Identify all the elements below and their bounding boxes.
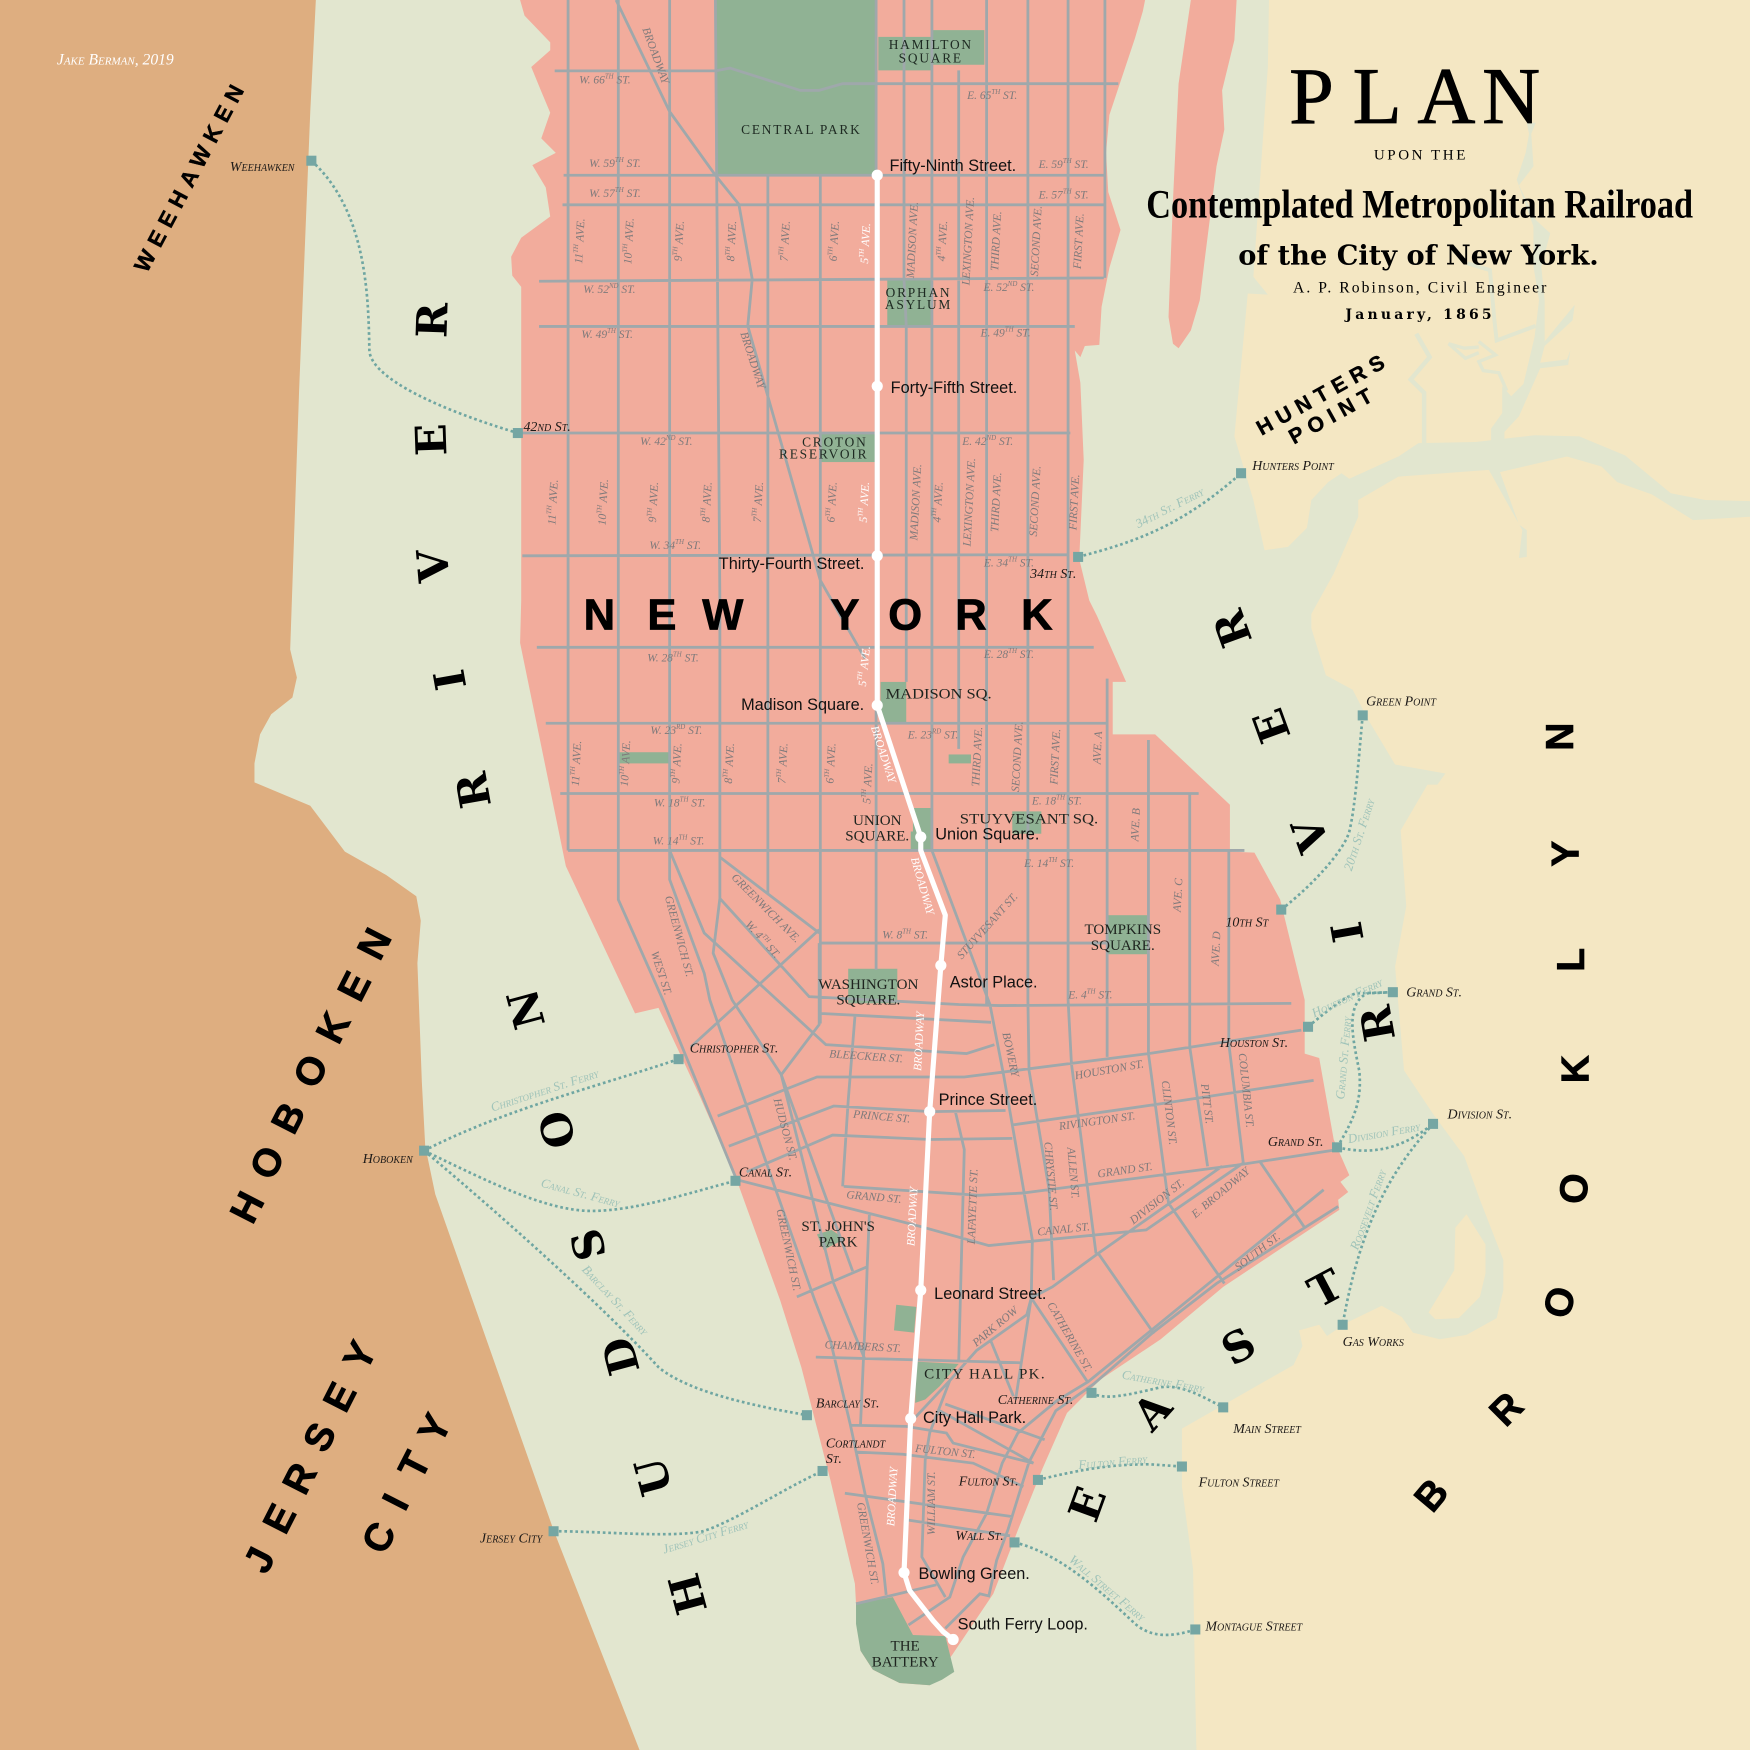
park: Union Square [911,808,931,850]
park labels: STUYVESANT SQ. [960,812,1098,828]
heading: Brooklyn: R [1482,1384,1532,1435]
heading: Hoboken: E [330,965,380,1008]
street name labels: CLINTON ST. [1159,1080,1178,1146]
street name labels: 9TH AVE. [672,220,687,262]
station labels: Prince Street. [939,1091,1037,1109]
park labels: ST. JOHN'S [801,1219,875,1235]
ferry landing labels: Montague Street [1204,1620,1304,1635]
street name labels: FULTON ST. [914,1443,976,1461]
street name labels: E. 42ND ST. [961,435,1013,448]
heading: Brooklyn [1406,723,1598,1520]
title: of the City of New York: of the City of New York. [1238,241,1599,272]
heading: Hudson River: H [659,1568,718,1620]
street name labels: 6TH AVE. [824,743,839,784]
street name labels: THIRD AVE. [970,727,985,787]
ferry route labels: Fulton Ferry [1077,1452,1149,1472]
street name labels: LEXINGTON AVE. [962,458,978,548]
heading: East River: E [1059,1481,1117,1528]
heading: Jersey City: S [295,1416,345,1459]
ferry landing labels: Grand St. [1406,986,1462,1001]
street name labels: DIVISION ST. [1127,1177,1187,1228]
street name labels: FIRST AVE. [1072,213,1087,270]
street name labels: AVE. C [1172,878,1185,913]
heading: Hudson River: D [593,1332,651,1380]
park labels: THE [891,1639,920,1655]
park labels: CENTRAL PARK [741,122,862,137]
heading: New York: NEW [584,591,744,639]
street name labels: 11TH AVE. [573,218,588,264]
street name labels: 6TH AVE. [827,220,842,262]
heading: Hunters Point: HUNTERS [1253,348,1395,440]
ferry landing labels: Fulton Street [1198,1476,1280,1491]
street name labels: W. 23RD ST. [650,724,702,737]
street name labels: CHAMBERS ST. [824,1339,901,1355]
street name labels: LAFAYETTE ST. [966,1169,981,1245]
street name labels: W. 14TH ST. [653,835,704,848]
street name labels: E. 34TH ST. [983,557,1034,570]
street name labels: 9TH AVE. [646,482,661,523]
park labels: BATTERY [872,1654,939,1670]
street name labels: HOUSTON ST. [1073,1058,1145,1082]
street grid [518,0,1338,1628]
heading: Hoboken: O [285,1048,337,1095]
heading: New York: YORK [830,591,1053,639]
street name labels: W. 49TH ST. [581,328,633,341]
heading: Jersey City: R [275,1456,326,1501]
heading: Weehawken: WEEHAWKEN [129,74,252,276]
street name labels: 7TH AVE. [778,220,793,262]
heading: Brooklyn: Y [1544,841,1587,867]
street name labels: STUYVESANT ST. [955,891,1020,962]
street name labels: 7TH AVE. [751,482,766,523]
street name labels: SOUTH ST. [1233,1231,1283,1274]
street name labels: PRINCE ST. [852,1109,911,1126]
ferry route labels: 34th St. Ferry [1132,484,1207,531]
street name labels: 5TH AVE. [861,763,875,804]
ferry landing labels: Hunters Point [1251,459,1335,474]
station labels: South Ferry Loop. [958,1615,1088,1633]
ferry route labels: Grand St. Ferry [1333,1015,1354,1100]
park: small west square [618,752,669,763]
ferry landing squares [306,156,1438,1634]
park: Tompkins Square [1108,915,1147,954]
park labels: TOMPKINS [1084,922,1161,938]
heading: Hudson River: I [425,666,477,694]
street name labels: FIRST AVE. [1067,474,1082,531]
street name labels: E. 18TH ST. [1031,795,1082,807]
street name labels: AVE. A [1091,730,1105,766]
heading: Jersey City: E [315,1376,365,1419]
heading: Jersey City: C [354,1516,405,1560]
heading: Brooklyn: O [1536,1282,1585,1323]
street name labels: BOWERY [999,1031,1021,1080]
parks [618,0,1147,1685]
street name labels: W. 42ND ST. [640,435,692,448]
street name labels: 11TH AVE. [569,740,584,786]
park: Orphan Asylum [887,280,932,326]
land: New Jersey shore [0,0,640,1750]
ferry landing labels: 10th St [1225,915,1270,930]
street name labels: E. 49TH ST. [980,327,1031,340]
heading: Brooklyn: O [1552,1172,1598,1206]
street name labels: W. 28TH ST. [647,652,699,664]
street name labels: E. 57TH ST. [1038,189,1089,201]
street name labels: W. 18TH ST. [654,797,705,810]
ferry route labels: Houston Ferry [1309,975,1386,1021]
heading: Hoboken: H [222,1185,273,1230]
park labels: UNION [853,813,902,829]
street name labels: W. 52ND ST. [583,284,636,296]
street name labels: BROADWAY [912,1010,927,1071]
street name labels: THIRD AVE. [989,211,1004,271]
heading: Jersey City [236,1335,460,1580]
ferry landing labels: Barclay St. [816,1396,879,1411]
street name labels: 10TH AVE. [618,740,633,787]
park labels [741,37,1161,1670]
heading: East River: T [1300,1259,1352,1319]
street name labels: WILLIAM ST. [926,1472,938,1535]
ferry landing labels: Green Point [1366,694,1437,709]
heading: Brooklyn: B [1406,1471,1457,1520]
heading: East River: R [1351,1001,1406,1045]
ferry route labels: Wall Street Ferry [1066,1552,1149,1625]
street name labels: 9TH AVE. [670,743,685,784]
ferry landing labels: Fulton St. [958,1474,1019,1489]
ferry landing labels: Division St. [1447,1107,1512,1122]
street name labels: 4TH AVE. [935,220,950,262]
street name labels: E. BROADWAY [1189,1164,1254,1221]
park labels: RESERVOIR [779,447,868,462]
title: Plan: PLAN [1289,52,1540,141]
ferry landing labels: 34th St. [1029,567,1076,582]
park labels: CITY HALL PK. [924,1366,1045,1382]
heading: East River: V [1282,810,1341,860]
heading: Hudson River: E [406,423,457,457]
subtitle: upon the: UPON THE [1374,148,1465,164]
park: small east square [949,754,971,763]
street name labels: GRAND ST. [846,1189,902,1206]
park: Madison Square [881,682,906,722]
subway route: white line [872,170,959,1645]
ferry landing labels: Houston St. [1219,1036,1288,1051]
ferry route labels: Roosevelt Ferry [1347,1167,1390,1253]
heading: Jersey City: T [391,1445,440,1486]
station labels: Madison Square. [741,696,864,714]
station labels: Union Square. [935,825,1039,843]
street name labels: GREENWICH ST. [773,1208,802,1292]
street name labels: MADISON AVE. [908,464,924,542]
street name labels: 8TH AVE. [722,743,737,784]
street name labels: AVE. D [1210,930,1223,967]
street name labels: THIRD AVE. [989,472,1004,532]
ferry landing labels: Gas Works [1343,1335,1404,1350]
heading: Hudson River [406,301,718,1620]
ferry route labels [489,484,1422,1625]
park labels: SQUARE. [845,828,909,844]
heading: Hudson River: S [561,1223,617,1266]
heading: Jersey City: Y [335,1335,386,1377]
street name labels: W. 66TH ST. [579,74,631,86]
street name labels: E. 23RD ST. [907,729,958,741]
street name labels: RIVINGTON ST. [1057,1110,1136,1133]
street name labels: WEST ST. [648,950,673,997]
street name labels: GREENWICH ST. [662,895,695,978]
heading: Brooklyn: K [1554,1055,1597,1083]
heading: East River: R [1203,603,1263,653]
ferry landing labels: Canal St. [739,1165,792,1180]
park labels: HAMILTON [889,37,973,52]
ferry landing labels: Christopher St. [690,1041,778,1056]
land: island in Wallabout Bay [1429,1214,1485,1319]
ferry landing labels: St. [826,1452,842,1467]
ferry landing labels: Hoboken [362,1152,414,1167]
heading: Hudson River: O [529,1105,587,1154]
heading: Hoboken: K [308,1006,359,1050]
ferry landing labels: Main Street [1232,1422,1302,1437]
ferry route labels: Canal St. Ferry [540,1176,622,1211]
street name labels: 10TH AVE. [622,218,637,265]
street name labels: 8TH AVE. [700,482,715,523]
park labels: SQUARE [899,50,963,65]
street name labels: SECOND AVE. [1029,205,1045,277]
park: Croton Reservoir [819,433,875,462]
street name labels: AVE. B [1129,808,1143,843]
park labels: WASHINGTON [818,977,918,993]
street name labels: W. 8TH ST. [882,929,928,941]
street name labels: 5TH AVE. [857,482,872,523]
heading: Hoboken: B [264,1096,315,1141]
street name labels: BROADWAY [905,1185,921,1246]
street name labels: BROADWAY [868,724,898,786]
heading: East River: S [1213,1318,1265,1376]
street name labels: 5TH AVE. [856,645,873,687]
park: Washington Square [848,969,897,1003]
street name labels: BROADWAY [639,26,671,87]
street name labels: BROADWAY [885,1465,900,1527]
park: Hudson Square [894,1305,916,1333]
street name labels: ALLEN ST. [1064,1146,1081,1199]
heading: Jersey City: Y [410,1407,460,1450]
heading: East River [1059,603,1406,1528]
heading: Hudson River: U [625,1452,683,1501]
station dots [872,170,959,1645]
street name labels: CHRYSTIE ST. [1041,1141,1059,1211]
title block [1146,52,1693,323]
park labels: PARK [819,1235,858,1251]
station labels [719,157,1088,1633]
ferry landing labels: Wall St. [955,1529,1004,1544]
street name labels: 8TH AVE. [724,220,739,262]
park labels: MADISON SQ. [886,687,992,703]
street name labels: CATHERINE ST. [1044,1300,1094,1374]
street name labels: MADISON AVE. [905,201,921,279]
street name labels: GREENWICH AVE. [729,872,803,945]
station labels: Bowling Green. [919,1565,1030,1583]
land: Manhattan island [511,0,1349,1685]
heading: Hoboken: N [349,922,401,967]
heading: Brooklyn: N [1539,723,1582,751]
street name labels: GREENWICH ST. [854,1501,880,1586]
ferry routes [311,161,1433,1635]
station labels: City Hall Park. [923,1409,1026,1427]
station labels: Astor Place. [950,974,1038,992]
heading: Hoboken [222,922,401,1230]
ferry landing labels: 42nd St. [523,420,571,435]
ferry route labels: 20th St. Ferry [1341,796,1378,872]
street name labels: PITT ST. [1198,1082,1215,1125]
engineer credit: A. P. Robinson, Civil Engineer [1293,279,1547,296]
street name labels: BLEECKER ST. [829,1048,903,1065]
date: January, 1865 [1343,307,1492,323]
station labels: Forty-Fifth Street. [891,379,1017,397]
street name labels: 6TH AVE. [825,482,840,523]
heading: Hudson River: V [408,546,461,585]
park: Hamilton Square [878,30,984,70]
ferry route labels: Jersey City Ferry [661,1517,751,1557]
street name labels: BROADWAY [908,856,936,918]
heading: East River: I [1322,918,1375,946]
heading: Jersey City: I [375,1488,418,1517]
street name labels: E. 59TH ST. [1038,159,1089,171]
heading: East River: E [1243,702,1301,749]
heading: Hudson River: R [447,768,502,812]
park: Stuyvesant Square [1012,811,1041,834]
street name labels: E. 65TH ST. [966,89,1017,102]
park labels: ASYLUM [885,297,952,312]
station labels: Thirty-Fourth Street. [719,555,864,573]
park: Central Park [715,0,876,175]
heading: Hudson River: N [498,984,556,1034]
ferry landing labels: Cortlandt [826,1437,887,1452]
credit: Jake Berman, 2019 [57,52,174,69]
street name labels: W. 57TH ST. [589,188,641,200]
ferry route labels: Barclay St. Ferry [579,1263,651,1339]
street name labels: PARK ROW [970,1304,1022,1350]
street name labels: 11TH AVE. [546,479,561,525]
station labels: Fifty-Ninth Street. [890,157,1016,175]
ferry landing labels: Catherine St. [998,1393,1073,1408]
park labels: SQUARE. [836,992,900,1008]
street name labels [546,26,1283,1586]
street name labels: LEXINGTON AVE. [960,197,977,286]
ferry landing labels [230,160,1512,1635]
park: St. John's Park [817,1230,845,1250]
island: Blackwell's Island [1169,0,1237,348]
heading: Jersey City: J [236,1541,284,1580]
park labels: CROTON [802,434,868,449]
land: Brooklyn and Queens [1182,0,1750,1750]
station labels: Leonard Street. [934,1285,1046,1303]
street name labels: E. 52ND ST. [983,281,1034,294]
creeks: Newtown Creek branches [1411,123,1575,443]
heading: Hoboken: O [242,1140,294,1186]
ferry landing labels: Weehawken [230,160,296,175]
street name labels: FIRST AVE. [1048,729,1063,786]
ferry route labels: Catherine Ferry [1121,1368,1206,1396]
street name labels: E. 28TH ST. [983,649,1034,661]
street name labels: GRAND ST. [1097,1161,1153,1181]
ferry landing labels: Grand St. [1268,1135,1324,1150]
heading: Hudson River: R [407,301,459,339]
park: The Battery [856,1597,954,1685]
street name labels: BROADWAY [737,330,768,392]
street name labels: W. 4TH ST. [742,918,783,961]
park labels: ORPHAN [886,285,951,300]
heading: Jersey City: E [255,1498,305,1540]
street name labels: E. 14TH ST. [1023,857,1074,870]
ferry route labels: Christopher St. Ferry [489,1066,601,1114]
street name labels: CANAL ST. [1037,1221,1090,1239]
street name labels: E. 4TH ST. [1067,989,1113,1002]
street name labels: SECOND AVE. [1010,721,1026,792]
ferry route labels: Division Ferry [1346,1119,1422,1146]
street name labels: 4TH AVE. [931,482,946,523]
street name labels: 10TH AVE. [596,479,611,526]
street name labels: 7TH AVE. [776,743,791,784]
park labels: SQUARE. [1091,938,1155,954]
street name labels: HUDSON ST. [770,1096,799,1162]
street name labels: 5TH AVE. [858,223,873,264]
heading: Hunters Point: POINT [1285,381,1382,449]
park: City Hall Park [915,1362,959,1403]
street name labels: COLUMBIA ST. [1236,1053,1255,1128]
ferry landing labels: Jersey City [480,1531,544,1546]
heading: Brooklyn: L [1550,948,1593,972]
street name labels: SECOND AVE. [1028,466,1044,537]
street name labels: W. 34TH ST. [649,539,701,552]
street name labels: W. 59TH ST. [589,157,641,170]
heading: East River: A [1123,1382,1183,1442]
